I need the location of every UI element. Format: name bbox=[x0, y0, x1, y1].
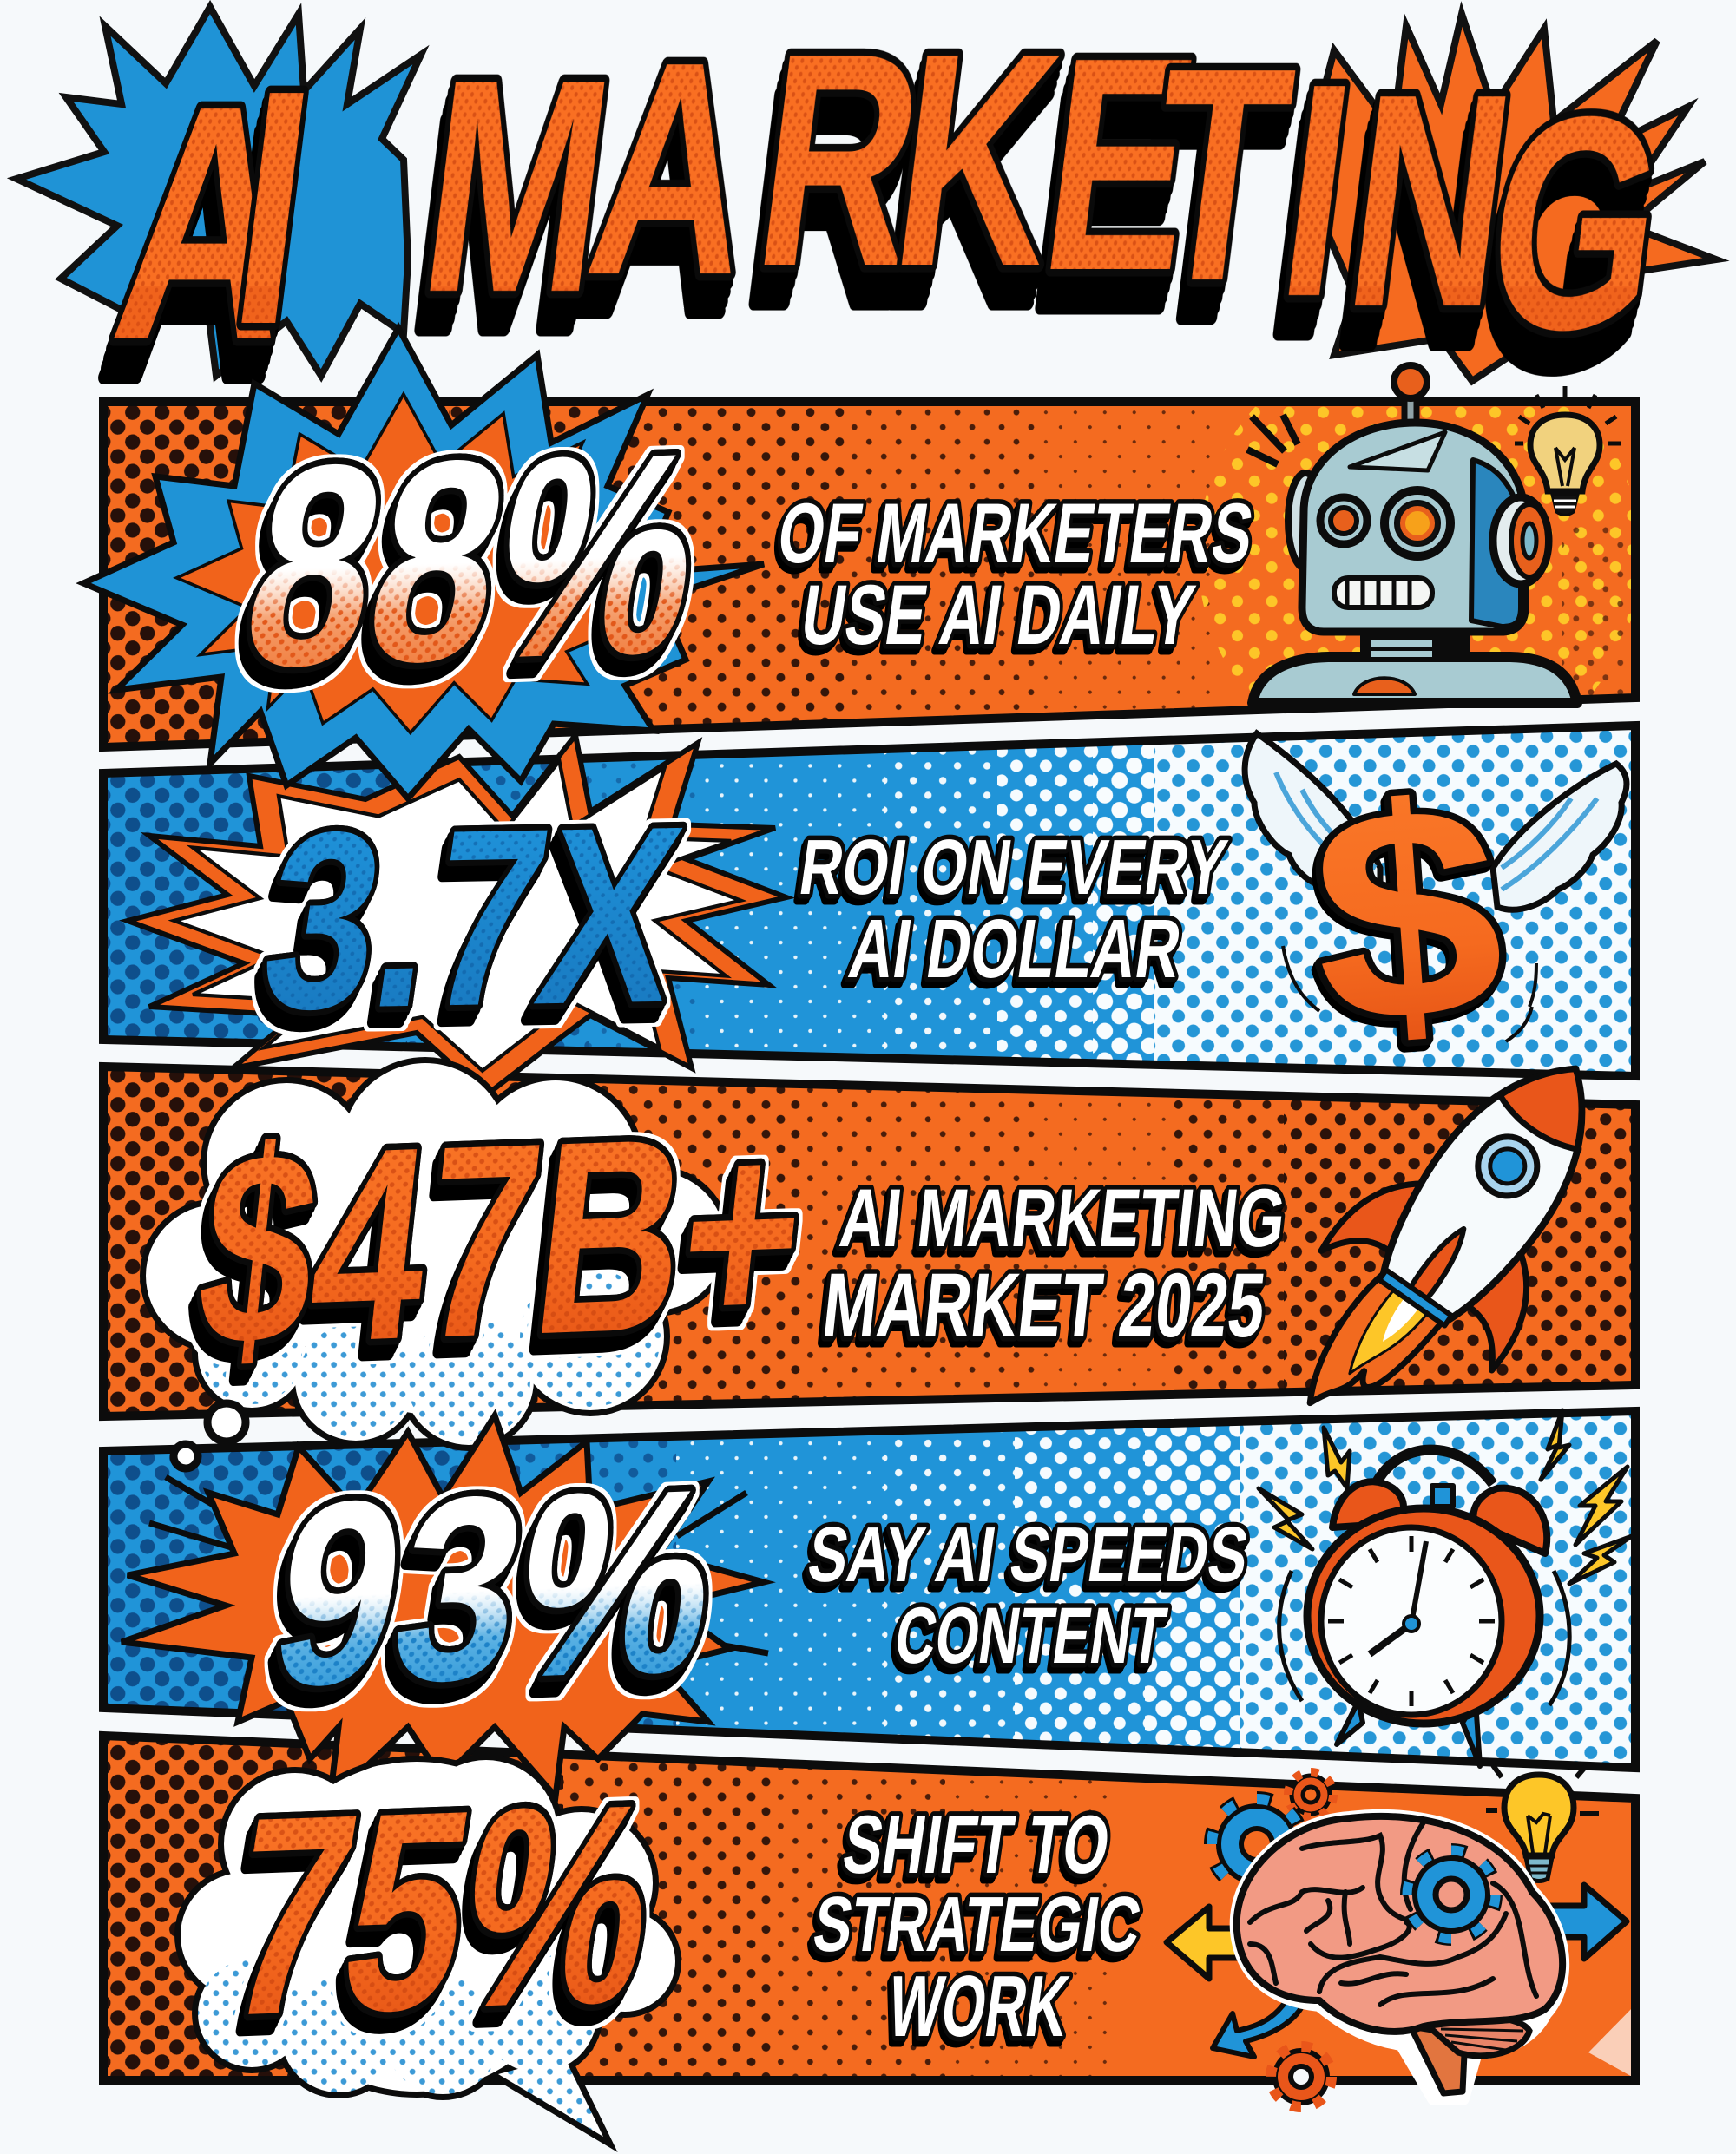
feet bbox=[1337, 1701, 1480, 1766]
stat: 93%: 93% bbox=[256, 1434, 736, 1742]
handle bbox=[1376, 1450, 1493, 1484]
lightning bolts bbox=[1259, 1410, 1632, 1584]
head bbox=[1302, 423, 1525, 632]
burst: orange star behind 93% bbox=[122, 1415, 768, 1801]
icon: rocket bbox=[1246, 1008, 1661, 1478]
speech cloud behind 75% bbox=[181, 1760, 675, 2137]
label: of marketers use AI daily: OF MARKETERS bbox=[773, 485, 1259, 581]
label: ROI on every AI dollar: AI DOLLAR bbox=[844, 903, 1187, 995]
icon: winged dollar bbox=[1245, 733, 1627, 1087]
hands bbox=[1411, 1541, 1426, 1624]
mouth bbox=[1334, 578, 1432, 607]
label: of marketers use AI daily bbox=[773, 485, 1259, 662]
label: shift to strategic work: WORK bbox=[883, 1958, 1075, 2055]
nose bbox=[1495, 1042, 1614, 1157]
speed lines bbox=[122, 1477, 768, 1653]
panel 2: blue bbox=[103, 720, 1635, 1085]
stat: 3.7X: 3.7X bbox=[248, 773, 697, 1062]
eyes bbox=[1320, 497, 1367, 544]
thought bubbles bbox=[174, 1403, 246, 1468]
right ear bbox=[1493, 497, 1549, 584]
emphasis ticks bbox=[1247, 415, 1298, 464]
head blue side panel bbox=[1471, 460, 1521, 627]
label: shift to strategic work bbox=[808, 1799, 1146, 2055]
stat: $47B+: $47B+ bbox=[187, 1076, 818, 1404]
brain gear bbox=[1407, 1850, 1496, 1939]
label: say AI speeds content: SAY AI SPEEDS bbox=[803, 1511, 1253, 1599]
fins bbox=[1320, 1154, 1435, 1284]
window bbox=[1466, 1126, 1549, 1207]
icon: gear bottom orange bbox=[1271, 2046, 1332, 2107]
body bbox=[1307, 1508, 1540, 1724]
antenna bbox=[1404, 395, 1417, 430]
flame bbox=[1293, 1266, 1449, 1439]
icon: light bulb bbox=[1515, 386, 1621, 516]
label: shift to strategic work: SHIFT TO bbox=[838, 1799, 1115, 1891]
panel 3: orange bbox=[103, 1063, 1635, 1419]
burst: white and orange star behind 3.7X bbox=[128, 735, 786, 1095]
icon: blue arrow right bbox=[1536, 1885, 1627, 1959]
label: AI marketing market 2025 bbox=[819, 1172, 1290, 1356]
label: ROI on every AI dollar: ROI ON EVERY bbox=[794, 824, 1232, 911]
panel 1: orange bbox=[99, 397, 1640, 752]
left ear bbox=[1288, 473, 1323, 568]
label: AI marketing market 2025: MARKET 2025 bbox=[819, 1255, 1270, 1356]
title bbox=[99, 0, 1687, 410]
halo bbox=[1237, 1816, 1562, 2098]
head top plate bbox=[1350, 432, 1445, 470]
left wing bbox=[1245, 733, 1380, 906]
label: of marketers use AI daily: USE AI DAILY bbox=[796, 567, 1200, 662]
icon: brain bbox=[1237, 1816, 1562, 2098]
icon: yellow bulb bbox=[1486, 1765, 1599, 1881]
stat: 75%: 75% bbox=[209, 1744, 676, 2076]
body bbox=[1253, 657, 1577, 703]
burst: orange title star bbox=[1302, 14, 1716, 381]
icon: alarm clock bbox=[1259, 1410, 1632, 1766]
icon: yellow arrow left bbox=[1167, 1907, 1241, 1979]
icon: gear left blue bbox=[1212, 1799, 1302, 1889]
panel 4: blue bbox=[103, 1406, 1635, 1770]
ticks bbox=[1328, 1536, 1495, 1706]
title word: AI: AI bbox=[99, 21, 328, 410]
stat: 88%: 88% bbox=[226, 393, 724, 728]
burst: blue title star bbox=[16, 7, 421, 376]
dollar sign: $ bbox=[1303, 740, 1512, 1087]
body bbox=[1364, 1033, 1627, 1335]
cerebellum bbox=[1424, 2016, 1529, 2056]
burst: blue and orange star behind 88% bbox=[83, 328, 764, 798]
central fin bbox=[1405, 1223, 1472, 1306]
cortex bbox=[1237, 1816, 1562, 2032]
thought cloud behind $47B+ bbox=[146, 1063, 738, 1468]
bells bbox=[1332, 1481, 1404, 1527]
icon: blue curved arrow bbox=[1213, 2000, 1302, 2057]
right wing bbox=[1493, 764, 1627, 910]
label: ROI on every AI dollar bbox=[794, 824, 1232, 995]
stem bbox=[1410, 2026, 1465, 2093]
panel 5: orange bbox=[103, 1731, 1635, 2083]
label: shift to strategic work: STRATEGIC bbox=[808, 1881, 1146, 1968]
motion lines bbox=[1283, 946, 1536, 1041]
title word: MARKETING: MARKETING bbox=[404, 0, 1687, 393]
label: say AI speeds content: CONTENT bbox=[890, 1590, 1172, 1680]
icon: gear top small bbox=[1288, 1772, 1333, 1817]
vibration lines bbox=[1279, 1571, 1569, 1705]
wrinkles bbox=[1250, 1822, 1536, 2005]
icon: robot bbox=[1247, 365, 1577, 703]
label: say AI speeds content bbox=[803, 1511, 1253, 1680]
label: AI marketing market 2025: AI MARKETING bbox=[836, 1172, 1290, 1264]
